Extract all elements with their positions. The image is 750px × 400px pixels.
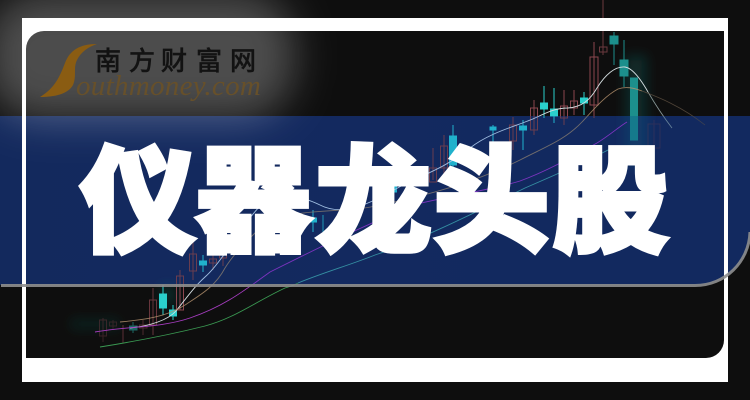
banner outline xyxy=(1,232,750,286)
teal candles xyxy=(130,86,588,333)
logo Chinese name: 南方财富网 xyxy=(95,41,256,78)
title: 仪器龙头股 xyxy=(80,110,668,276)
moving average lines xyxy=(95,67,705,347)
logo domain: outhmoney.com xyxy=(76,70,261,102)
candlestick chart xyxy=(70,0,705,347)
logo: southmoney xyxy=(40,41,261,102)
blue banner xyxy=(0,116,750,285)
banner tint over chart xyxy=(0,116,750,285)
red hollow candles xyxy=(100,0,660,343)
chart glow smudges xyxy=(70,55,647,330)
logo glow xyxy=(0,0,295,120)
logo swoosh S xyxy=(40,44,97,97)
